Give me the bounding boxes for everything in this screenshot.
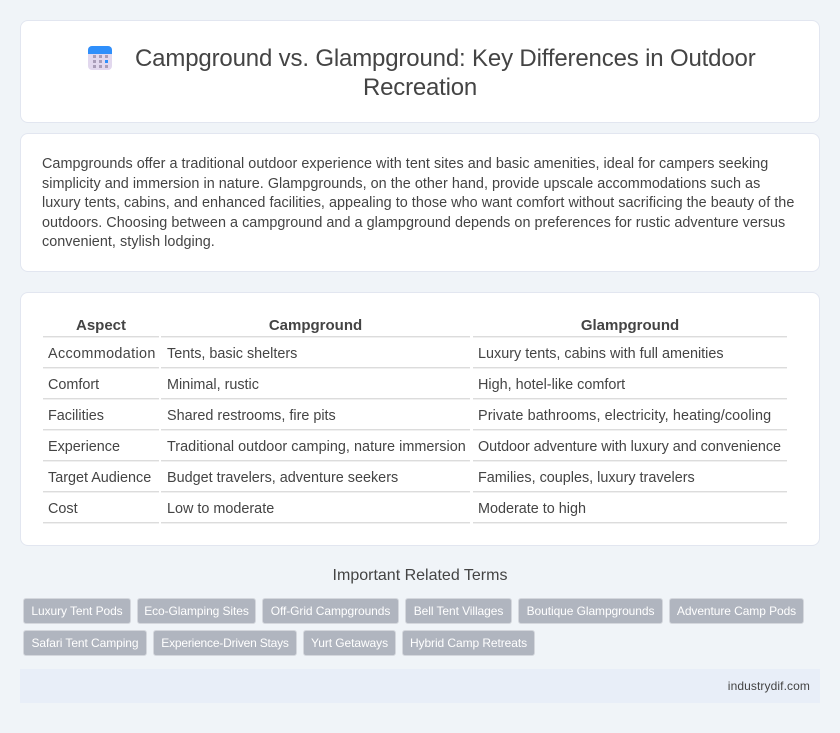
row: Comfort: Minimal, rustic [167,377,259,393]
row: Cost: Moderate to high [478,501,586,517]
panel: intro text card [20,133,820,272]
row: Accommodation: Accommodation [48,346,156,362]
row: Cost: Cost [48,501,78,517]
tag: Safari Tent Camping [32,636,138,650]
text block: introduction: convenient, stylish lodging. [42,234,215,250]
tag [23,630,147,656]
tag [669,598,804,624]
title: Recreation [363,74,477,101]
tag [23,598,131,624]
tag: Experience-Driven Stays [161,636,289,650]
tag: Yurt Getaways [311,636,388,650]
footer source text: industrydif.com [728,679,810,693]
row: Comfort: High, hotel-like comfort [478,377,625,393]
row: Accommodation: Tents, basic shelters [167,346,297,362]
text block: introduction: Campgrounds offer a traditional outdoor experience with tent sites and basic amenities, ideal for campers seeking [42,156,768,172]
title: Campground vs. Glampground: Key Differences in Outdoor [135,45,756,72]
table header: Glampground [581,317,679,334]
tag [303,630,396,656]
row: Experience: Traditional outdoor camping, nature immersion [167,439,466,455]
text block: introduction: simplicity and immersion in nature. Glampgrounds, on the other hand, provide upscale accommodations such as [42,176,760,192]
panel: title card [20,20,820,123]
row: Facilities: Shared restrooms, fire pits [167,408,336,424]
heading: important related terms: Important Related Terms [333,567,507,584]
row: Target Audience: Families, couples, luxury travelers [478,470,695,486]
icon: calendar [88,46,112,70]
table header: Campground [269,317,362,334]
row: Accommodation: Luxury tents, cabins with full amenities [478,346,724,362]
text block: introduction: luxury tents, cabins, and enhanced facilities, appealing to those who want comfort without sacrificing the beauty of the [42,195,794,211]
row: Comfort [48,377,626,393]
row: Accommodation [48,346,724,362]
row: Cost [48,501,586,517]
title [135,45,756,101]
row: Target Audience: Target Audience [48,470,151,486]
row: Experience: Experience [48,439,120,455]
row: Comfort: Comfort [48,377,99,393]
text block: introduction [42,156,794,250]
tag [262,598,399,624]
tag: Eco-Glamping Sites [144,604,249,618]
tag [402,630,535,656]
tag [518,598,663,624]
table header [76,317,679,334]
row: Facilities [48,408,771,424]
footer bar [20,669,820,703]
tag: Hybrid Camp Retreats [410,636,527,650]
row: Experience [48,439,781,455]
row: Facilities: Facilities [48,408,104,424]
row: Facilities: Private bathrooms, electricity, heating/cooling [478,408,771,424]
row: Target Audience [48,470,695,486]
tag: Luxury Tent Pods [31,604,123,618]
tag [405,598,512,624]
tag: Bell Tent Villages [414,604,503,618]
table header: Aspect [76,317,126,334]
row: Cost: Low to moderate [167,501,274,517]
tag [137,598,256,624]
comparison table [43,317,787,524]
tag: Off-Grid Campgrounds [271,604,390,618]
tag [153,630,297,656]
text block: introduction: outdoors. Choosing between a campground and a glampground depends on preferences for rustic adventure versus [42,215,785,231]
row: Target Audience: Budget travelers, adventure seekers [167,470,398,486]
tag list [23,598,804,656]
panel: comparison table card [20,292,820,546]
row: Experience: Outdoor adventure with luxury and convenience [478,439,781,455]
tag: Boutique Glampgrounds [527,604,654,618]
tag: Adventure Camp Pods [677,604,796,618]
